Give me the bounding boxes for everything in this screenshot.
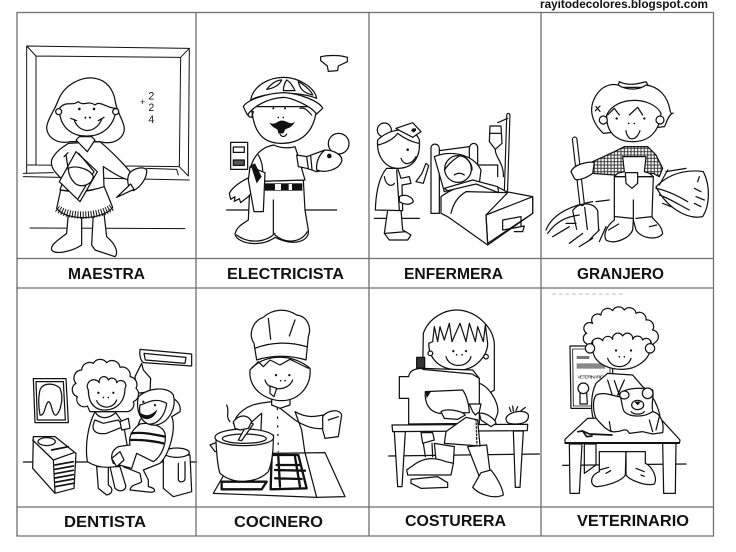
syringe on table bbox=[578, 431, 612, 437]
illustration: electrician bbox=[227, 55, 349, 244]
sewing machine bbox=[399, 357, 481, 424]
table bbox=[392, 424, 528, 487]
panel: electricista bbox=[227, 55, 349, 283]
panel: cocinero bbox=[210, 310, 345, 531]
illustration: vet with dog bbox=[553, 294, 686, 493]
label: maestra: MAESTRA bbox=[68, 266, 145, 283]
dental lamp bbox=[135, 349, 192, 393]
vet figure bbox=[583, 307, 660, 427]
sum on board: + bbox=[140, 97, 145, 107]
fabric and hands bbox=[441, 410, 496, 446]
patient figure bbox=[112, 389, 174, 468]
illustration: dentist and patient bbox=[23, 349, 197, 497]
floor line bbox=[563, 464, 686, 465]
illustration: teacher at blackboard bbox=[23, 46, 189, 257]
panel: dentista bbox=[23, 349, 197, 531]
teacher figure bbox=[47, 78, 147, 257]
pincushion bbox=[506, 406, 528, 424]
cooking pot bbox=[210, 405, 274, 481]
illustration: seamstress at sewing machine bbox=[389, 310, 539, 497]
illustration: chef with pot bbox=[210, 310, 345, 497]
floor line bbox=[227, 208, 337, 212]
dental cart bbox=[33, 437, 76, 493]
straw pile bbox=[546, 200, 609, 247]
framed tooth bbox=[33, 379, 68, 423]
label: electricista: ELECTRICISTA bbox=[227, 266, 344, 283]
label: enfermera: ENFERMERA bbox=[404, 266, 503, 283]
hay bale bbox=[656, 168, 708, 217]
seamstress figure bbox=[407, 310, 503, 497]
sum digits: 4 bbox=[148, 114, 154, 126]
stove bbox=[213, 453, 345, 497]
floor line bbox=[389, 454, 539, 456]
panel: enfermera bbox=[374, 115, 533, 283]
label: veterinario: VETERINARIO bbox=[577, 513, 689, 530]
chef figure bbox=[233, 310, 342, 453]
wall socket bbox=[231, 142, 248, 169]
scan specks bbox=[553, 292, 623, 295]
nurse figure bbox=[375, 123, 429, 240]
blackboard bbox=[23, 46, 189, 229]
illustration: farmer with pitchfork and hay bbox=[546, 82, 708, 247]
sum digits: 2 bbox=[148, 91, 154, 103]
dental chair bbox=[123, 396, 180, 492]
floor line bbox=[23, 460, 197, 464]
iv stand bbox=[489, 115, 508, 190]
certificate: VETERINARIO bbox=[577, 375, 604, 381]
panel: granjero bbox=[546, 82, 708, 283]
panel: veterinario bbox=[553, 294, 689, 530]
dog bbox=[593, 388, 663, 434]
sum digits: 2 bbox=[148, 102, 154, 114]
sum digits bbox=[148, 91, 154, 126]
label: costurera: COSTURERA bbox=[405, 513, 506, 530]
dental machine bbox=[163, 448, 192, 497]
pitchfork bbox=[573, 139, 599, 230]
pedal bbox=[411, 477, 448, 488]
dentist figure bbox=[72, 359, 139, 495]
label: cocinero: COCINERO bbox=[234, 514, 323, 531]
panel: maestra bbox=[23, 46, 189, 283]
ceiling lamp bbox=[321, 55, 347, 71]
panel: costurera bbox=[389, 310, 539, 530]
bed bbox=[431, 143, 533, 245]
label: dentista: DENTISTA bbox=[64, 514, 146, 531]
electrician figure bbox=[229, 77, 349, 244]
illustration: nurse and patient in bed bbox=[374, 115, 533, 245]
farmer figure bbox=[571, 82, 673, 242]
floor line bbox=[374, 216, 419, 220]
table and legs bbox=[565, 417, 680, 493]
certificate bbox=[570, 346, 613, 408]
label: granjero: GRANJERO bbox=[577, 266, 664, 283]
